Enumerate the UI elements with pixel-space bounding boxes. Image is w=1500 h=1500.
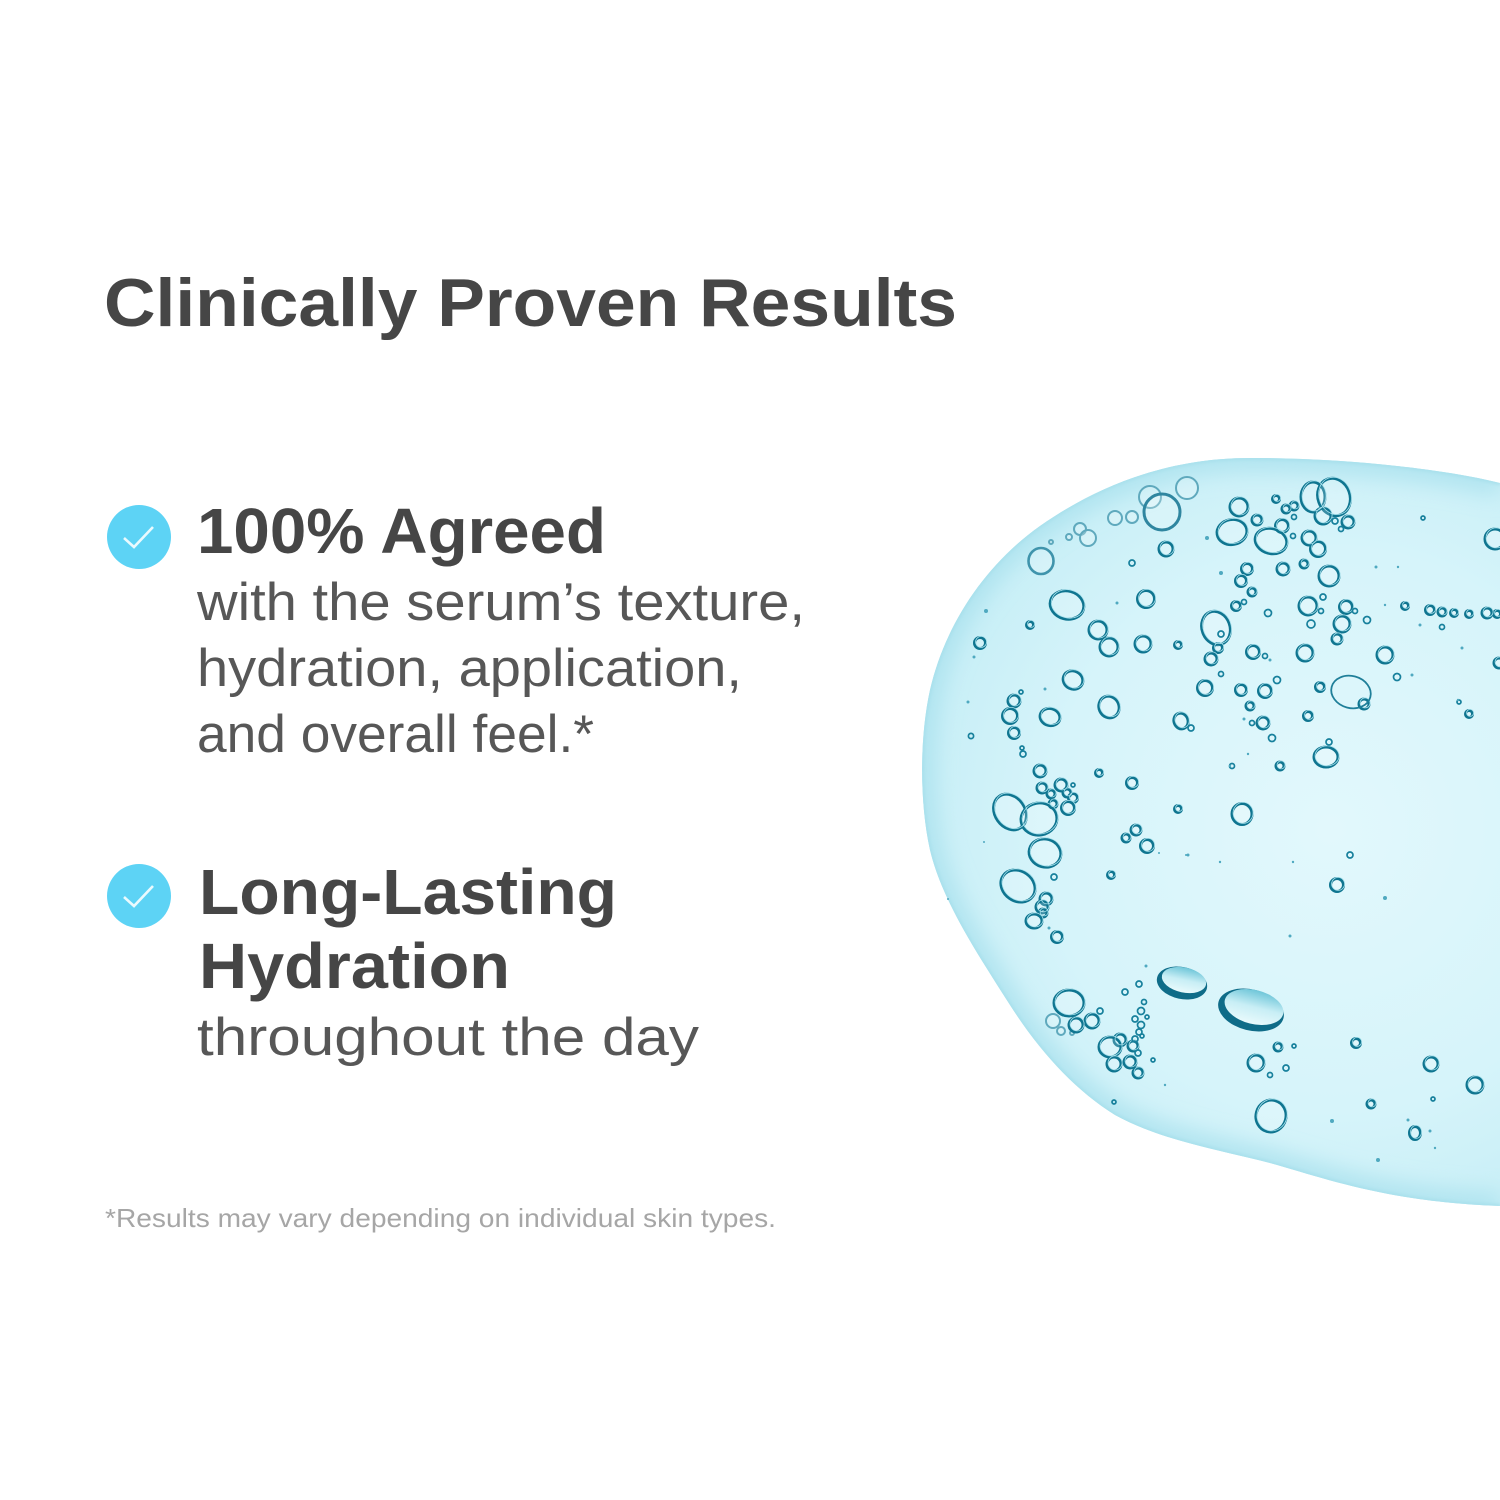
heading: 100% agreed: 100% Agreed <box>197 495 606 567</box>
description: throughout the day: throughout the day <box>197 1008 700 1067</box>
small bubbles <box>968 514 1461 1104</box>
footnote: *Results may vary depending on individual skin types. <box>105 1203 776 1233</box>
description: texture and feel: and overall feel.* <box>197 705 594 764</box>
benefit: long-lasting hydration <box>107 856 700 1067</box>
medium bubbles <box>974 473 1500 1140</box>
heading: long-lasting hydration: Long-Lasting <box>199 856 617 928</box>
large drop bubble <box>1154 962 1210 1004</box>
description: texture and feel: hydration, application, <box>197 639 742 698</box>
gel body <box>900 440 1500 1220</box>
icon: check badge <box>107 505 171 569</box>
thin large bubble <box>1328 671 1374 713</box>
heading: long-lasting hydration: Hydration <box>199 930 510 1002</box>
serum gel blob with bubbles <box>900 440 1500 1220</box>
pale edge bubbles <box>1028 477 1198 1035</box>
tiny specks <box>947 536 1464 1162</box>
description: texture and feel <box>196 573 805 764</box>
icon: check badge <box>107 864 171 928</box>
largest drop bubble <box>1214 982 1288 1038</box>
title: Clinically Proven Results <box>104 265 957 341</box>
description: texture and feel: with the serum’s texture, <box>196 573 805 632</box>
heading: long-lasting hydration <box>199 856 617 1002</box>
benefit: 100% agreed <box>107 495 805 764</box>
